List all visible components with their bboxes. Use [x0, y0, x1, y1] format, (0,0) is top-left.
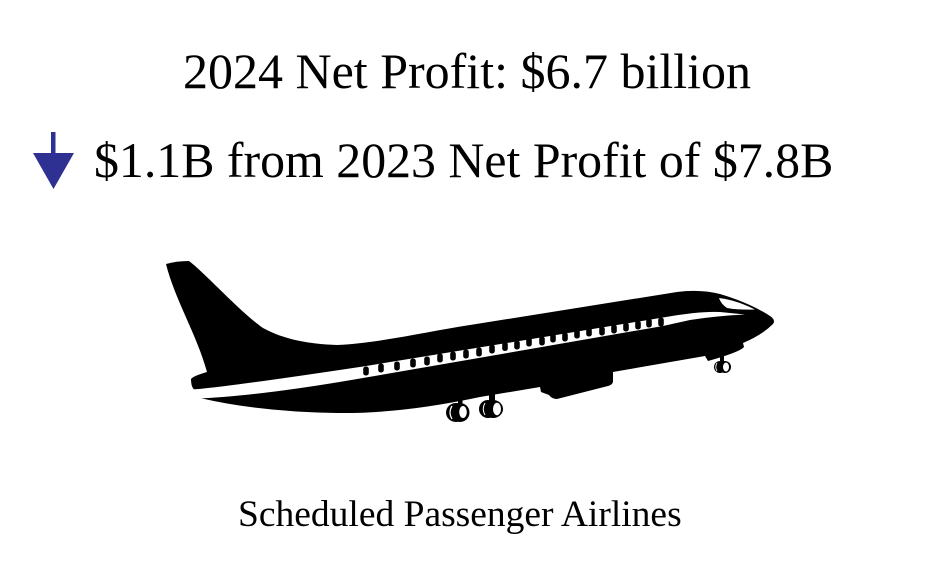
subtitle: change from 2023: $1.1B from 2023 Net Profit of $7.8B	[94, 133, 833, 188]
cockpit window	[719, 298, 755, 310]
title: net profit: 2024 Net Profit: $6.7 billion	[183, 43, 751, 99]
front landing gear	[714, 355, 731, 373]
caption: scheduled passenger airlines: Scheduled Passenger Airlines	[238, 494, 682, 535]
main landing gear front	[479, 390, 503, 418]
passenger windows	[363, 318, 664, 376]
white cheatline stripe	[192, 312, 745, 398]
main landing gear rear	[446, 396, 470, 422]
icon: down arrow	[33, 132, 74, 189]
fuselage and tail	[166, 261, 774, 413]
